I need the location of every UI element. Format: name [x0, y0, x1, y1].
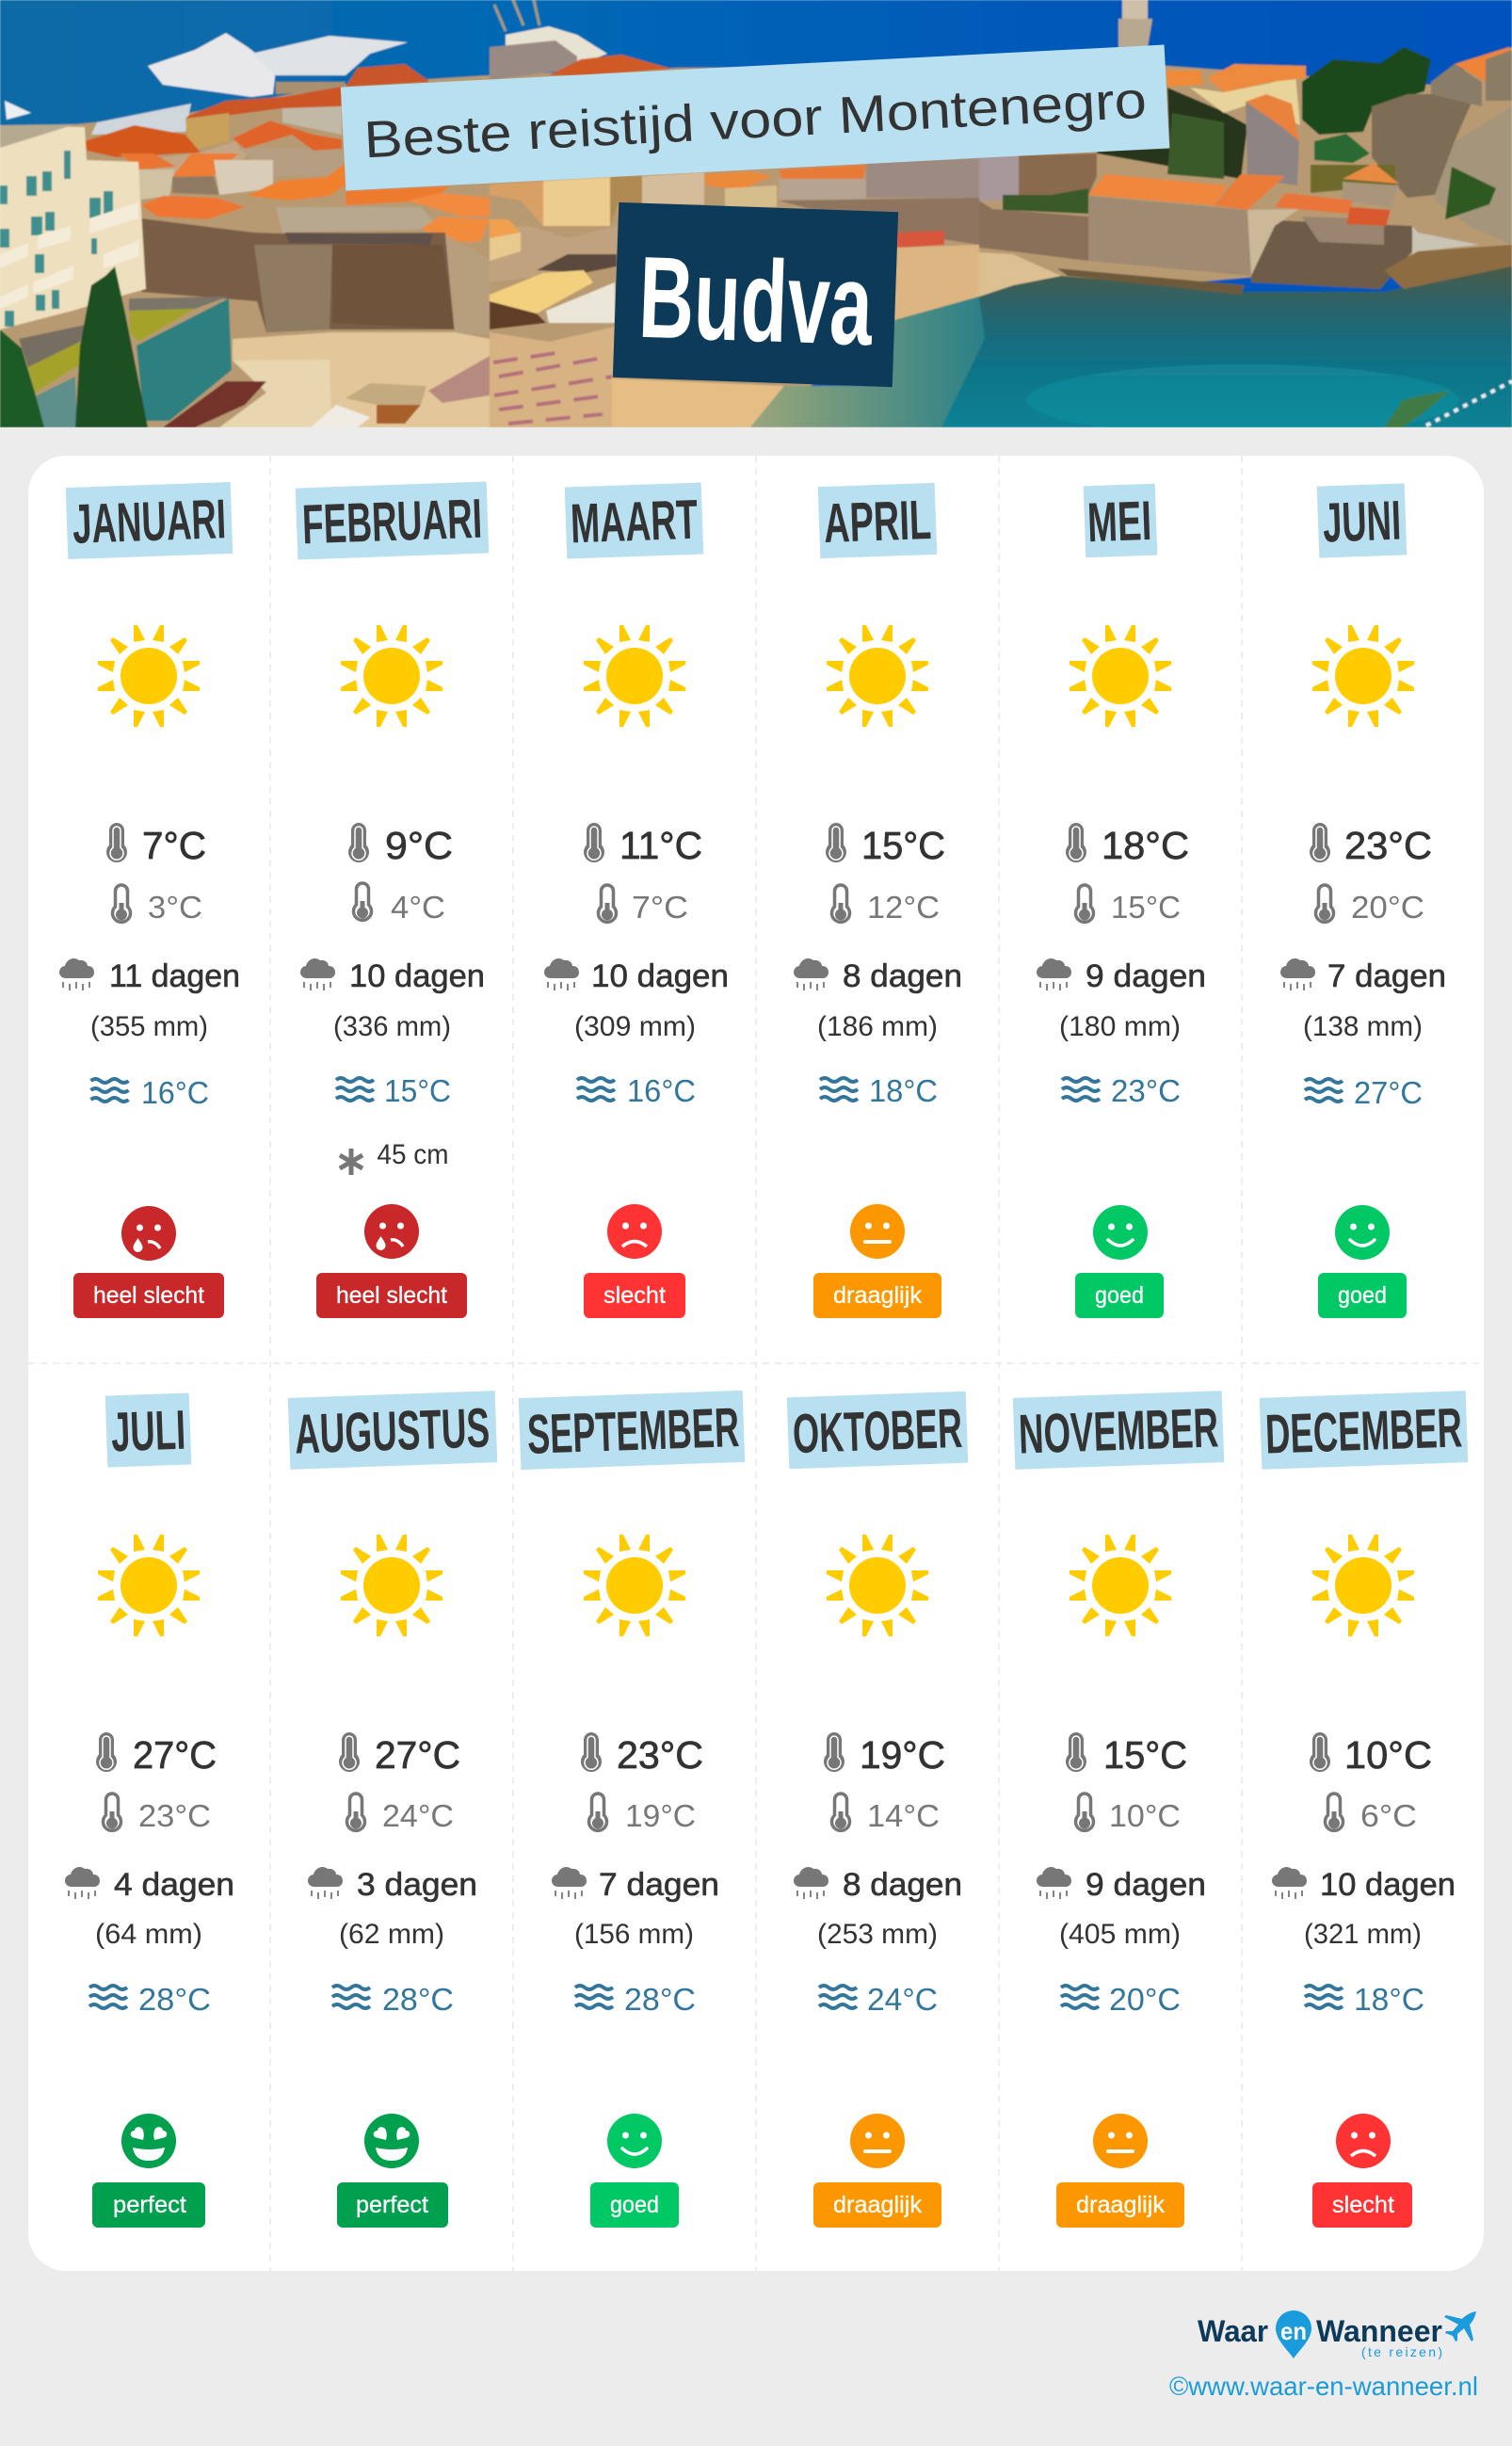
icon: sun — [341, 625, 442, 727]
sea temperature: 27°C — [1354, 1075, 1423, 1110]
month label: AUGUSTUS — [294, 1396, 491, 1466]
sea temperature: 16°C — [141, 1075, 209, 1110]
rating: heel slecht — [336, 1282, 447, 1309]
maximum temperature: 11°C — [619, 824, 702, 867]
rain days: 7 dagen — [1327, 958, 1446, 994]
sea temperature: 15°C — [384, 1073, 451, 1108]
column and row dividers — [28, 456, 1484, 2271]
rainfall: (405 mm) — [1059, 1919, 1181, 1950]
maximum temperature: 19°C — [860, 1733, 945, 1777]
rainfall: (253 mm) — [817, 1919, 938, 1950]
rain days: 8 dagen — [843, 958, 962, 994]
minimum temperature — [113, 885, 202, 925]
rating: heel slecht — [93, 1282, 204, 1309]
month label: MAART — [570, 489, 699, 555]
minimum temperature: 24°C — [382, 1798, 454, 1833]
rating: goed — [1338, 1282, 1387, 1309]
rating: goed — [610, 2192, 659, 2218]
snow: 45 cm — [377, 1139, 448, 1170]
minimum temperature — [1326, 1794, 1417, 1833]
rainfall: (186 mm) — [817, 1011, 938, 1042]
logo: Waar en Wanneer: (te reizen) — [1361, 2344, 1442, 2359]
minimum temperature: 3°C — [148, 890, 202, 925]
maximum temperature: 10°C — [1344, 1733, 1432, 1777]
panel: april — [794, 483, 962, 1318]
website url: ©www.waar-en-wanneer.nl — [1169, 2372, 1478, 2401]
month label — [1317, 483, 1407, 558]
sea temperature — [336, 1073, 451, 1108]
sea temperature — [332, 1982, 454, 2017]
minimum temperature: 6°C — [1360, 1798, 1417, 1833]
month label — [296, 481, 489, 560]
sea temperature — [819, 1982, 938, 2017]
logo: Waar en Wanneer: Waar — [1198, 2314, 1268, 2348]
rating: draaglijk — [1076, 2192, 1165, 2218]
month label: APRIL — [823, 489, 932, 555]
rainfall: (355 mm) — [90, 1011, 208, 1042]
sea temperature: 18°C — [869, 1073, 938, 1108]
sea temperature — [90, 1075, 209, 1110]
minimum temperature — [346, 1794, 454, 1833]
rating: draaglijk — [833, 1282, 922, 1309]
rating — [337, 2114, 448, 2228]
maximum temperature — [1310, 823, 1432, 867]
icon: sun — [1070, 1535, 1171, 1636]
month label — [787, 1392, 968, 1469]
rainfall: (62 mm) — [339, 1919, 444, 1950]
sea temperature: 18°C — [1354, 1982, 1424, 2017]
panel: oktober — [787, 1392, 968, 2228]
rain days — [794, 1867, 962, 1903]
month label: SEPTEMBER — [526, 1396, 740, 1466]
minimum temperature: 23°C — [138, 1798, 211, 1833]
month label — [565, 482, 703, 559]
minimum temperature — [832, 1794, 940, 1833]
icon: sun — [584, 625, 685, 727]
rating — [813, 1204, 941, 1318]
maximum temperature: 23°C — [617, 1733, 703, 1777]
minimum temperature — [832, 885, 940, 925]
title banner: Beste reistijd voor Montenegro — [362, 71, 1148, 169]
panel: december — [1260, 1391, 1468, 2228]
rating — [316, 1204, 467, 1318]
maximum temperature: 27°C — [133, 1733, 217, 1777]
icon: sun — [1312, 625, 1414, 727]
rain days — [308, 1867, 477, 1903]
sea temperature: 24°C — [867, 1982, 938, 2017]
rain days — [794, 958, 962, 994]
minimum temperature: 14°C — [867, 1798, 940, 1833]
panel: juli — [65, 1392, 234, 2228]
icon: sun — [341, 1535, 442, 1636]
sea temperature: 20°C — [1109, 1982, 1181, 2017]
maximum temperature — [1310, 1732, 1432, 1777]
maximum temperature — [339, 1732, 460, 1777]
icon: airplane — [1444, 2311, 1476, 2341]
rating — [1318, 1205, 1407, 1318]
panel: juni — [1280, 483, 1446, 1318]
rating: draaglijk — [833, 2192, 922, 2218]
maximum temperature — [826, 823, 945, 867]
rainfall: (64 mm) — [95, 1919, 202, 1950]
rain days — [1037, 1867, 1206, 1903]
panel: november — [1013, 1391, 1224, 2228]
rating — [73, 1206, 224, 1318]
sea temperature — [1305, 1982, 1424, 2017]
month label: OKTOBER — [792, 1397, 963, 1465]
icon: map pin: en — [1280, 2317, 1307, 2345]
rain days — [552, 1867, 719, 1903]
month label — [66, 482, 233, 559]
month label: FEBRUARI — [301, 488, 483, 555]
maximum temperature — [584, 823, 702, 867]
sea temperature: 28°C — [138, 1982, 211, 2017]
icon: sun — [1312, 1535, 1414, 1636]
minimum temperature: 20°C — [1351, 890, 1424, 925]
panel: augustus — [288, 1391, 497, 2228]
rating — [1312, 2114, 1412, 2228]
minimum temperature: 15°C — [1111, 890, 1181, 925]
icon: sun — [98, 1535, 200, 1636]
city label: Budva — [613, 202, 898, 387]
main white panel — [28, 456, 1484, 2271]
rating — [1075, 1205, 1164, 1318]
minimum temperature — [1075, 1794, 1181, 1833]
logo: Waar en Wanneer: Wanneer — [1316, 2314, 1442, 2348]
minimum temperature — [589, 1794, 696, 1833]
panel: januari — [59, 482, 240, 1318]
month label: NOVEMBER — [1018, 1396, 1219, 1466]
rating — [590, 2114, 679, 2228]
rainfall: (309 mm) — [574, 1011, 696, 1042]
maximum temperature — [96, 1732, 217, 1777]
sea temperature — [1061, 1982, 1181, 2017]
month label — [1084, 484, 1157, 557]
hero photo: Budva old town and bay — [0, 0, 1512, 436]
month label — [818, 483, 937, 558]
minimum temperature — [1075, 885, 1181, 925]
minimum temperature: 19°C — [625, 1798, 696, 1833]
icon: sun — [584, 1535, 685, 1636]
maximum temperature: 15°C — [1103, 1733, 1187, 1777]
rating: perfect — [113, 2192, 186, 2218]
maximum temperature — [1066, 1732, 1187, 1777]
rain days: 7 dagen — [599, 1867, 719, 1903]
month label — [288, 1391, 497, 1470]
sea temperature: 28°C — [382, 1982, 454, 2017]
minimum temperature: 10°C — [1109, 1798, 1181, 1833]
minimum temperature — [1316, 885, 1424, 925]
rain days — [65, 1867, 234, 1903]
month label — [1013, 1391, 1224, 1470]
rating — [584, 1204, 685, 1318]
minimum temperature — [104, 1794, 211, 1833]
rating — [1056, 2114, 1184, 2228]
panel: februari — [296, 481, 489, 1318]
icon: sun — [98, 625, 200, 727]
rain days: 11 dagen — [109, 958, 240, 994]
maximum temperature: 9°C — [385, 824, 453, 867]
maximum temperature — [581, 1732, 703, 1777]
sea temperature: 23°C — [1111, 1073, 1181, 1108]
rain days: 3 dagen — [357, 1867, 477, 1903]
minimum temperature: 12°C — [867, 890, 940, 925]
maximum temperature — [106, 823, 206, 867]
sea temperature — [1062, 1073, 1181, 1108]
snow — [340, 1139, 448, 1175]
rain days: 10 dagen — [1320, 1867, 1456, 1903]
rain days: 10 dagen — [591, 958, 729, 994]
title banner — [341, 45, 1169, 190]
month label — [519, 1391, 745, 1470]
rain days: 4 dagen — [114, 1867, 234, 1903]
rain days: 10 dagen — [349, 958, 485, 994]
minimum temperature — [599, 885, 688, 925]
panel: maart — [544, 482, 729, 1318]
maximum temperature: 27°C — [375, 1733, 460, 1777]
rating: slecht — [1332, 2192, 1394, 2218]
icon: sun — [827, 625, 928, 727]
rating: perfect — [356, 2192, 428, 2218]
maximum temperature — [1066, 823, 1189, 867]
city label: Budva: Budva — [636, 233, 876, 370]
panel: mei — [1037, 484, 1206, 1318]
icon: sun — [827, 1535, 928, 1636]
rainfall: (336 mm) — [333, 1011, 451, 1042]
month label: JANUARI — [72, 488, 227, 555]
rain days: 8 dagen — [843, 1867, 962, 1903]
rainfall: (138 mm) — [1303, 1011, 1423, 1042]
rain days: 9 dagen — [1086, 958, 1206, 994]
minimum temperature: 7°C — [632, 890, 688, 925]
month label: JULI — [110, 1399, 186, 1463]
month label: JUNI — [1322, 490, 1402, 554]
rainfall: (180 mm) — [1059, 1011, 1181, 1042]
sea temperature — [577, 1073, 696, 1108]
panel: september — [519, 1391, 745, 2228]
rating — [813, 2114, 941, 2228]
minimum temperature: 4°C — [391, 890, 445, 925]
sea temperature — [1305, 1075, 1423, 1110]
icon: sun — [1070, 625, 1171, 727]
logo: Waar en Wanneer — [1198, 2310, 1476, 2359]
maximum temperature: 7°C — [142, 824, 206, 867]
rain days — [1037, 958, 1206, 994]
maximum temperature — [824, 1732, 945, 1777]
icon: map pin — [1276, 2310, 1311, 2358]
maximum temperature: 18°C — [1102, 824, 1189, 867]
maximum temperature — [348, 823, 453, 867]
sea temperature — [89, 1982, 211, 2017]
rating: slecht — [603, 1282, 666, 1309]
rainfall: (156 mm) — [574, 1919, 694, 1950]
rating: goed — [1095, 1282, 1144, 1309]
maximum temperature: 15°C — [861, 824, 945, 867]
month label: MEI — [1086, 490, 1152, 554]
sea temperature: 16°C — [627, 1073, 696, 1108]
minimum temperature — [354, 883, 445, 925]
rain days: 9 dagen — [1086, 1867, 1206, 1903]
sea temperature: 28°C — [624, 1982, 696, 2017]
rainfall: (321 mm) — [1304, 1919, 1422, 1950]
sea temperature — [820, 1073, 938, 1108]
maximum temperature: 23°C — [1344, 824, 1432, 867]
rating — [92, 2114, 205, 2228]
sea temperature — [575, 1982, 696, 2017]
month label — [105, 1392, 191, 1468]
